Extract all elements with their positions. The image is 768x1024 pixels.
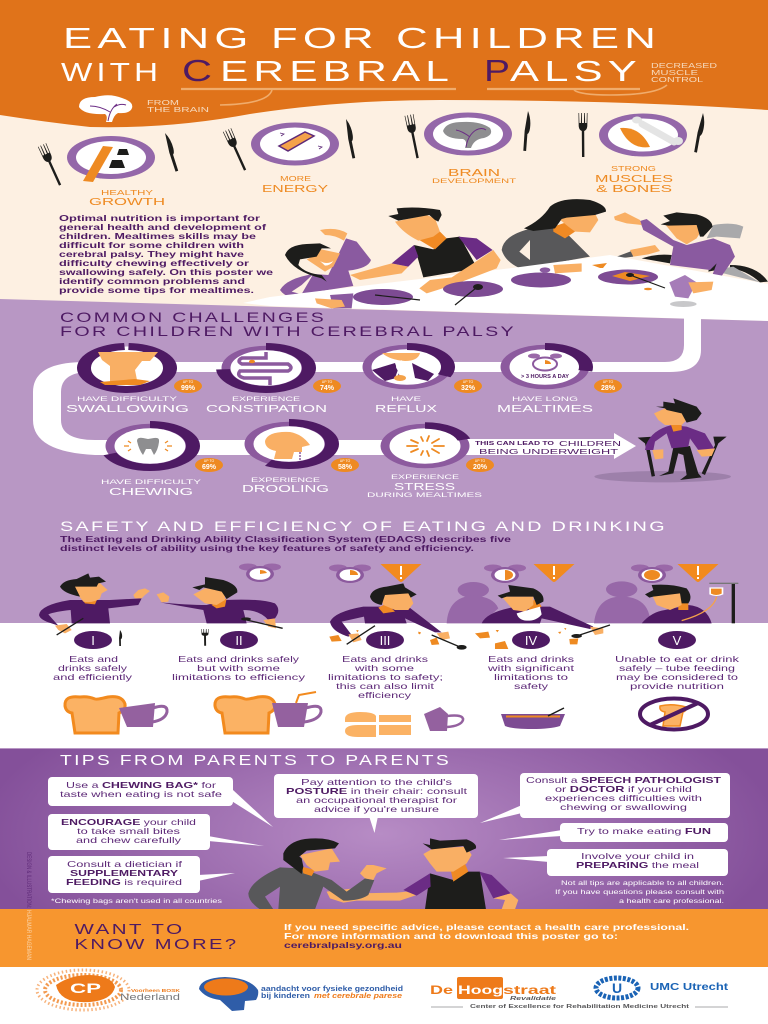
tip: encourage: and chew carefully [76, 835, 182, 845]
note: If you have questions please consult with [555, 889, 725, 896]
heading: COMMON CHALLENGES [60, 309, 326, 325]
level V child [642, 583, 738, 623]
note: a health care professional. [619, 898, 724, 905]
intro text: difficulty chewing effectively or [59, 258, 250, 268]
icon: throat [98, 352, 158, 384]
alarm clocks and warnings [239, 564, 718, 583]
description: but with some [197, 663, 280, 673]
icon: weights [109, 149, 129, 168]
caption: HAVE LONG [512, 396, 578, 403]
intro text: Optimal nutrition is important for [59, 213, 261, 223]
drip and tube [682, 583, 738, 623]
heading: SAFETY AND EFFICIENCY OF EATING AND DRINKING [60, 518, 667, 534]
title: EREBRAL [220, 56, 454, 88]
badge: UP TO [475, 459, 486, 463]
tip: preparing: PREPARING the meal [576, 860, 699, 870]
badge [466, 458, 494, 472]
plate caption: BRAIN [448, 168, 500, 179]
level V [615, 631, 740, 730]
caption: DURING MEALTIMES [367, 492, 483, 499]
icon: tooth [137, 438, 159, 455]
tip: chewing bag [48, 777, 273, 827]
father's arm [327, 888, 417, 903]
note: Not all tips are applicable to all children. [561, 880, 724, 887]
badge: 28% [601, 385, 616, 392]
caption [206, 396, 327, 415]
note [555, 880, 725, 905]
level I child [39, 573, 150, 635]
logos [37, 970, 729, 1011]
description: Eats and [69, 654, 118, 664]
tip: preparing [503, 849, 728, 876]
title: ALSY [510, 56, 642, 88]
arrow with underweight text [466, 433, 636, 459]
level II child [157, 577, 283, 628]
caption [66, 396, 189, 415]
tip: posture: Pay attention to the child's [301, 777, 452, 787]
plate caption: & BONES [596, 183, 672, 195]
caption [242, 477, 329, 495]
tip: encourage: ENCOURAGE your child [61, 817, 196, 827]
intro text: children. Mealtimes skills may be [59, 231, 256, 241]
mom [502, 199, 660, 273]
level IV: IV [525, 633, 537, 648]
badge: 20% [473, 464, 488, 471]
badge: UP TO [322, 380, 333, 384]
level V: V [673, 633, 682, 648]
label: from the brain: FROM [147, 98, 179, 107]
caption: HAVE DIFFICULTY [101, 479, 202, 486]
plate: brain development [405, 111, 532, 185]
intro text [59, 213, 273, 295]
plate: more energy [223, 118, 357, 195]
badge: 99% [181, 385, 196, 392]
title: EATING FOR CHILDREN [63, 23, 661, 55]
logo: De Hoogstraat: Hoog [458, 983, 503, 997]
label: from the brain: THE BRAIN [147, 105, 209, 114]
tip: speech pathologist: experiences difficulties with [545, 793, 702, 803]
tip: posture [274, 774, 478, 833]
caption: EXPERIENCE [232, 396, 301, 403]
logo: CP Nederland: Voorheen BOSK [131, 988, 181, 993]
level III: III [380, 633, 390, 648]
level III [328, 631, 463, 737]
logo: De Hoogstraat: Revalidatie [510, 996, 556, 1002]
description: Eats and drinks [488, 654, 574, 664]
badge [174, 379, 202, 393]
badge: UP TO [603, 380, 614, 384]
contact text [284, 922, 689, 950]
plate caption: STRONG [611, 166, 656, 173]
arrow with underweight text: CHILDREN [559, 439, 621, 448]
caption: MEALTIMES [497, 404, 594, 415]
panel: safety and efficiency [0, 518, 768, 748]
heading: TIPS FROM PARENTS TO PARENTS [60, 752, 451, 769]
wheelchair [642, 224, 768, 282]
intro text: cerebral palsy. They might have [59, 249, 244, 259]
father [403, 838, 518, 909]
tip: dietician: Consult a dietician if [67, 859, 183, 869]
logo: De Hoogstraat: De [430, 983, 453, 997]
badge [195, 458, 223, 472]
level I: I [91, 633, 95, 648]
badge: 74% [320, 385, 335, 392]
boy [614, 212, 735, 283]
badge [313, 379, 341, 393]
level IV child [475, 585, 610, 649]
description: provide nutrition [630, 681, 724, 691]
table [243, 255, 768, 321]
logo: CP Nederland: Nederland [120, 992, 180, 1002]
caption: HAVE DIFFICULTY [77, 396, 178, 403]
credit: HJALMAR HAGEMAN [25, 910, 32, 960]
caption [375, 396, 438, 415]
white path connecting circles [33, 315, 701, 455]
icon: bowl with spoon [501, 708, 565, 729]
arrow with underweight text: THIS CAN LEAD TO [475, 441, 554, 447]
tip: dietician [48, 856, 235, 893]
icon: burst [407, 436, 444, 456]
tip: chewing bag: Use a CHEWING BAG* for [66, 780, 216, 790]
intro text: provide some tips for mealtimes. [59, 285, 254, 295]
logo: De Hoogstraat [430, 977, 728, 1010]
EDACS description [60, 534, 511, 553]
icon: grey brain [443, 122, 491, 148]
EDACS description: The Eating and Drinking Ability Classification System (EDACS) describes five [60, 534, 511, 544]
badge: 69% [202, 464, 217, 471]
description: drinks safely [58, 663, 128, 673]
girl's hand and cup [315, 293, 353, 308]
plate caption: HEALTHY [101, 190, 154, 197]
girl [280, 229, 371, 303]
description: safely – tube feeding [619, 663, 735, 673]
description [172, 654, 306, 682]
label: decreased muscle control [651, 61, 718, 84]
challenge: reflux [366, 346, 482, 415]
logo: CP Nederland [37, 970, 181, 1010]
badge: UP TO [183, 380, 194, 384]
tip: fun [499, 823, 728, 842]
icon: bone [642, 124, 674, 142]
logo: CP Nederland: CP [70, 980, 101, 996]
plate caption [262, 176, 328, 195]
challenge: drooling [242, 422, 359, 495]
description: Eats and drinks [342, 654, 428, 664]
plate caption: ENERGY [262, 183, 328, 195]
icon: stomach reflux [372, 363, 434, 381]
description: safety [514, 681, 549, 691]
logo: UMC Utrecht: UMC Utrecht [650, 982, 729, 993]
boy's hand and sippy cup [669, 275, 713, 307]
label: decreased muscle control: CONTROL [651, 75, 703, 84]
mom's hand on the table [540, 263, 582, 273]
caption [101, 479, 202, 498]
tip: speech pathologist [480, 773, 730, 823]
plate caption [595, 166, 673, 195]
level I [53, 630, 167, 733]
family at the table illustration [243, 199, 768, 321]
logo: aandacht: met cerebrale parese [314, 991, 402, 1000]
panel: common challenges [33, 309, 731, 499]
icon: energy sparks [280, 133, 322, 149]
title: WITH [61, 57, 162, 87]
plate caption: GROWTH [89, 196, 165, 208]
level III child [329, 583, 467, 650]
level II: II [235, 633, 243, 648]
description: Unable to eat or drink [615, 654, 740, 664]
white band [0, 623, 768, 748]
caption: CONSTIPATION [206, 404, 327, 415]
badge [331, 458, 359, 472]
description: with significant [486, 663, 575, 673]
plate: muscles and bones [578, 113, 706, 195]
logo: De Hoogstraat: straat [503, 983, 556, 997]
credit: DESIGN & ILLUSTRATION: [25, 852, 32, 908]
badge: 58% [338, 464, 353, 471]
mother and father talking [248, 838, 518, 909]
icon: ruler [83, 146, 113, 182]
mother [248, 838, 387, 909]
logo: UMC Utrecht [596, 978, 729, 998]
description: with some [353, 663, 414, 673]
intro text: difficult for some children with [59, 240, 244, 250]
description: limitations to safety; [328, 672, 443, 682]
footnote: *Chewing bags aren't used in all countries [51, 898, 223, 905]
plate caption: DEVELOPMENT [432, 178, 516, 185]
icon: head in profile [265, 432, 310, 459]
logo: aandacht: bij kinderen [261, 991, 310, 1000]
logo: De Hoogstraat: Center of Excellence for Rehabilitation Medicine Utrecht [470, 1004, 689, 1010]
badge [594, 379, 622, 393]
silhouettes [447, 581, 650, 623]
heading: FOR CHILDREN WITH CEREBRAL PALSY [60, 323, 516, 339]
icon: intestines [239, 352, 291, 385]
icon: battery [279, 132, 314, 151]
description [615, 654, 740, 691]
description [328, 654, 443, 700]
caption: REFLUX [375, 404, 438, 415]
tip: encourage: to take small bites [77, 826, 180, 836]
heading: WANT TO [74, 921, 184, 938]
description: efficiency [358, 690, 412, 700]
dad [350, 207, 493, 280]
description [486, 654, 575, 691]
caption: EXPERIENCE [251, 477, 321, 484]
header band [0, 0, 768, 127]
icon: no food sign [640, 698, 708, 730]
tip: dietician: SUPPLEMENTARY [70, 868, 178, 878]
description: and efficiently [53, 672, 133, 682]
EDACS description: distinct levels of ability using the key features of safety and efficiency. [60, 543, 474, 553]
challenge: long mealtimes [497, 346, 622, 415]
tip: chewing bag: taste when eating is not safe [60, 789, 222, 799]
caption: DROOLING [242, 484, 329, 495]
description [53, 654, 133, 682]
logo: UMC Utrecht: U [612, 980, 622, 996]
underweight child with crutches [594, 398, 731, 482]
level II [172, 629, 321, 733]
contact text: cerebralpalsy.org.au [284, 940, 402, 950]
label: decreased muscle control: DECREASED [651, 61, 718, 70]
tip: posture: POSTURE in their chair: consult [286, 786, 468, 796]
challenge: stress [367, 426, 494, 499]
description: this can also limit [336, 681, 435, 691]
logo: aandacht [199, 977, 403, 1011]
icon: toast and cup with straw [215, 692, 321, 733]
heading [74, 921, 238, 953]
caption: EXPERIENCE [391, 474, 460, 481]
tip: dietician: FEEDING is required [66, 877, 182, 887]
intro text: general health and development of [59, 222, 266, 232]
plate caption: MUSCLES [595, 173, 673, 185]
description: limitations to efficiency [172, 672, 306, 682]
panel: want to know more [0, 909, 768, 967]
tip: speech pathologist: chewing or swallowing [560, 802, 687, 812]
plates and food [353, 263, 665, 305]
intro text: swallowing safely. On this poster we [59, 267, 273, 277]
background: cream upper area [0, 90, 768, 330]
description: may be considered to [616, 672, 738, 682]
panel: tips from parents to parents [0, 748, 768, 909]
plate caption: MORE [280, 176, 311, 183]
title: P [484, 53, 510, 88]
tip: speech pathologist: Consult a SPEECH PATHOLOGIST [526, 775, 722, 785]
caption: STRESS [394, 482, 455, 493]
plate caption [89, 190, 165, 208]
icon: clock [528, 354, 562, 370]
title [61, 23, 661, 88]
badge: 32% [461, 385, 476, 392]
logo: aandacht: aandacht voor fysieke gezondheid [261, 984, 403, 993]
caption [497, 396, 594, 415]
plate: healthy growth [38, 132, 180, 208]
tip: encourage [48, 814, 264, 850]
caption [367, 474, 483, 499]
challenge: chewing [101, 424, 223, 498]
tip: posture: advice if you're unsure [314, 804, 439, 814]
heading [60, 309, 516, 339]
contact text: If you need specific advice, please contact a health care professional. [284, 922, 689, 932]
tip: preparing: Involve your child in [581, 851, 694, 861]
description: Eats and drinks safely [178, 654, 300, 664]
badge [454, 379, 482, 393]
tip: speech pathologist: or DOCTOR if your child [555, 784, 692, 794]
caption: CHEWING [109, 487, 193, 498]
challenge: swallowing [66, 346, 202, 415]
contact text: For more information and to download this poster go to: [284, 931, 618, 941]
description: limitations to [494, 672, 568, 682]
panel: common challenges background [0, 299, 768, 623]
icon: toast and cup [65, 697, 167, 733]
arrow with underweight text: BEING UNDERWEIGHT [479, 447, 619, 456]
caption: HAVE [391, 396, 422, 403]
level IV [486, 631, 575, 729]
tip: fun: Try to make eating FUN [577, 826, 711, 836]
badge: UP TO [204, 459, 215, 463]
label: decreased muscle control: MUSCLE [651, 68, 698, 77]
icon: brain [79, 95, 132, 122]
plate caption [432, 168, 516, 185]
intro text: identify common problems and [59, 276, 245, 286]
badge: UP TO [340, 459, 351, 463]
title: C [182, 53, 212, 88]
label: from the brain [147, 98, 209, 114]
challenge: long mealtimes: > 3 HOURS A DAY [521, 374, 570, 380]
tip: posture: an occupational therapist for [296, 795, 457, 805]
caption: SWALLOWING [66, 404, 189, 415]
title underlines and connectors [181, 85, 667, 105]
icon: mashed food and sippy cup [345, 707, 463, 737]
heading: KNOW MORE? [74, 936, 238, 953]
challenge: constipation [206, 346, 341, 415]
icon: muscle [620, 128, 650, 147]
dad's hand and arm on the table [419, 250, 501, 293]
badge: UP TO [463, 380, 474, 384]
